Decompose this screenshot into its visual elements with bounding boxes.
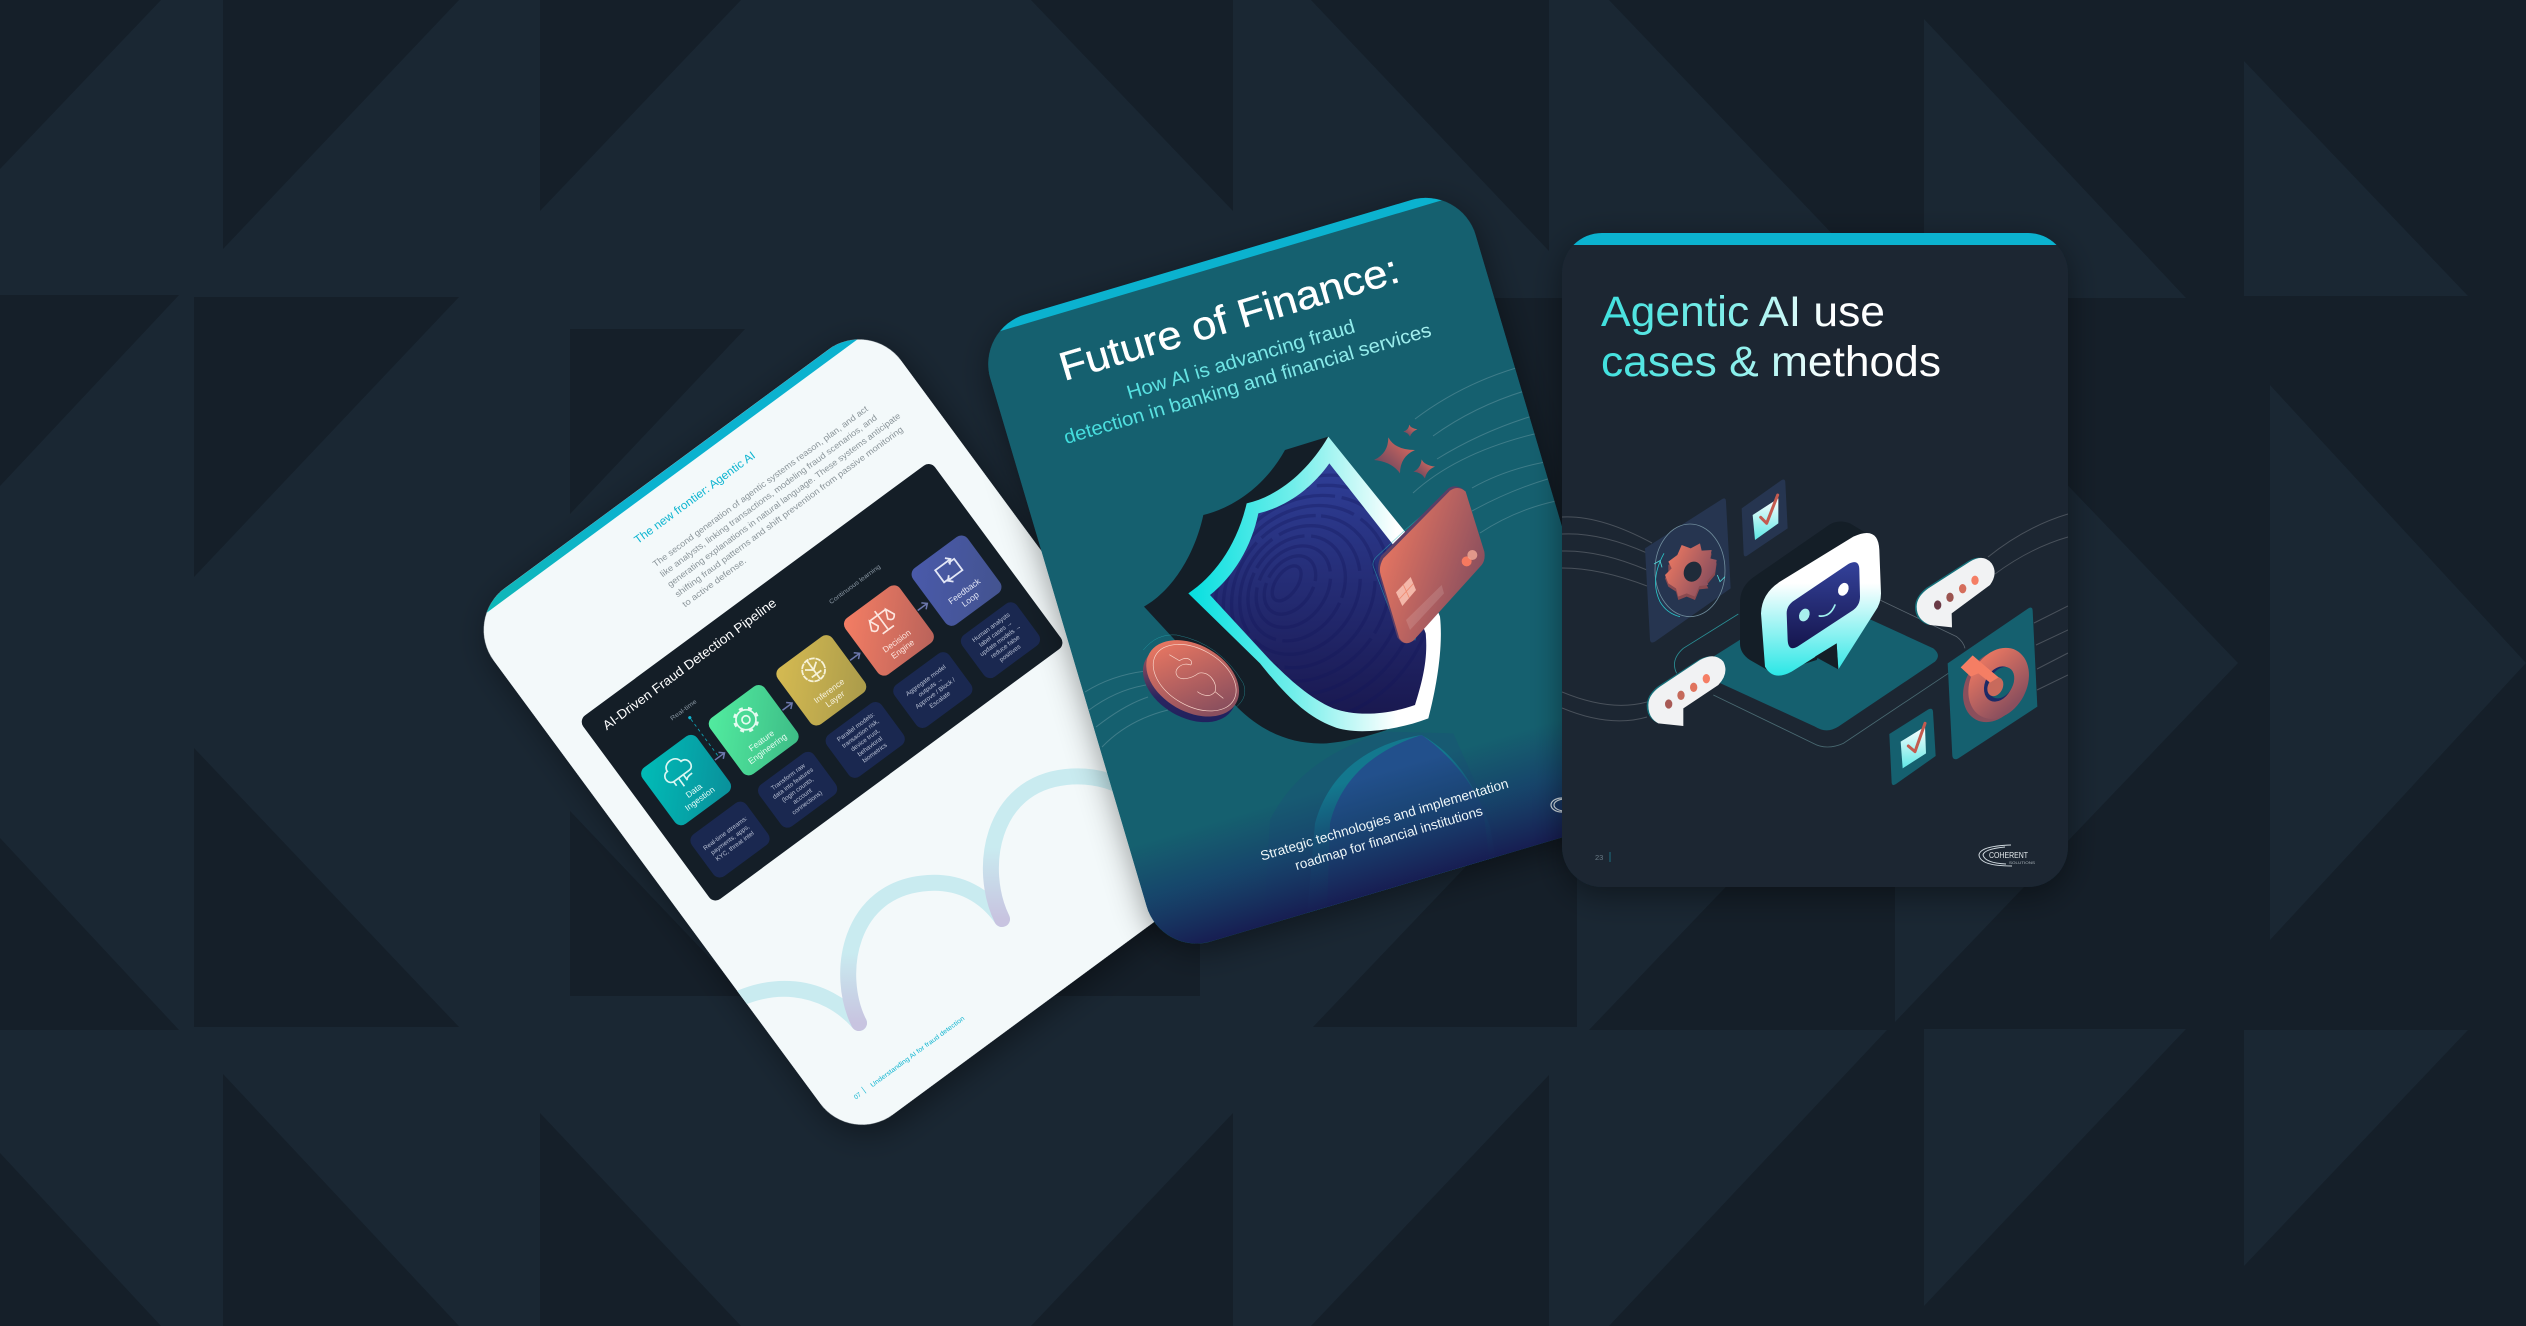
icon: sparkle stars [1374, 425, 1435, 478]
pipeline title: AI-Driven Fraud Detection Pipeline [600, 595, 779, 733]
body paragraph [651, 390, 917, 609]
icon: credit card [1373, 486, 1485, 643]
decorative arcs [715, 776, 1145, 1023]
icon: scales [863, 603, 900, 638]
description: feature engineering: account [792, 787, 814, 806]
label: real-time [669, 698, 731, 766]
description: feature engineering: connections) [791, 790, 824, 816]
step: data ingestion: Data [684, 781, 704, 800]
arrows between steps [712, 600, 930, 763]
step: inference layer [773, 632, 869, 729]
step: inference layer: Inference [812, 676, 846, 705]
shield reflection arch [1308, 735, 1504, 913]
icon: brain [798, 654, 830, 686]
footer: page 07: Understanding AI for fraud detection [869, 1015, 966, 1089]
body paragraph: like analysts, linking transactions, modeling fraud scenarios, and [658, 412, 879, 579]
icon: gear panel [1645, 498, 1731, 643]
footer: page 07 [852, 1013, 966, 1101]
logo: coherent solutions: SOLUTIONS [2009, 861, 2036, 865]
cover subtitle: How AI is advancing fraud [1124, 316, 1358, 404]
description: inference layer [822, 699, 908, 781]
description: inference layer: transaction risk, [841, 718, 881, 750]
cover title: Future of Finance: [1054, 247, 1404, 390]
bottom navy fade [1134, 739, 1562, 944]
description: feedback loop: Human analysts [971, 612, 1011, 644]
logo: coherent solutions [1979, 845, 2036, 866]
body paragraph: generating explanations in natural language. These systems anticipate [665, 411, 903, 589]
step: inference layer: Layer [823, 688, 847, 709]
panel: pipeline diagram [579, 461, 1066, 904]
description: data ingestion: payments, apps, [710, 823, 751, 857]
description: feature engineering [755, 749, 840, 831]
body paragraph: to active defense. [680, 555, 748, 609]
step: decision engine: Decision [881, 627, 913, 655]
step: decision engine: Engine [889, 637, 916, 661]
step: data ingestion: Ingestion [683, 784, 717, 813]
description: inference layer: behavioral [856, 735, 884, 758]
icon: target panel [1948, 608, 2041, 759]
page number 23: 23 [1595, 853, 1603, 862]
description: decision engine: Escalate [928, 690, 952, 710]
shield [1144, 436, 1441, 744]
cover subtitle: detection in banking and financial services [1061, 319, 1434, 449]
description: feature engineering: Transform raw [770, 762, 807, 792]
panel: left tilted page, agentic AI pipeline [483, 339, 1156, 1133]
step: data ingestion [638, 732, 734, 828]
icon: loop arrows [933, 554, 965, 586]
cover strapline: roadmap for financial institutions [1293, 803, 1485, 873]
icon: speech bubble right [1915, 558, 1995, 627]
description: feedback loop: reduce false [990, 634, 1022, 660]
step: feature engineering: Feature [747, 728, 776, 753]
page title: cases & methods [1601, 338, 1941, 386]
logo: coherent solutions: COHERENT [1989, 851, 2028, 860]
icon: cloud [658, 752, 699, 793]
description: decision engine: Approve / Block / [914, 677, 957, 711]
page number 23 [1595, 852, 1610, 862]
panel: middle tilted cover, future of finance [988, 198, 1562, 953]
icon: coin [1142, 634, 1245, 722]
step: feature engineering [706, 682, 802, 779]
description: feedback loop: update models → [979, 623, 1023, 658]
step: feedback loop [908, 532, 1005, 629]
description: decision engine: Aggregate model [905, 664, 947, 698]
description: feature engineering: data into features [771, 766, 815, 801]
icon: robot chat bubble [1740, 521, 1881, 676]
label: real-time: Real-time [669, 698, 699, 722]
step: decision engine [841, 582, 937, 679]
description: decision engine [890, 649, 976, 731]
icon: gear [730, 704, 762, 736]
description: feedback loop: positives [998, 643, 1022, 664]
description: data ingestion [687, 798, 773, 881]
icon: checkbox panel bottom [1889, 709, 1936, 785]
page title: Agentic AI use [1601, 288, 1885, 336]
cover strapline: Strategic technologies and implementation [1259, 776, 1510, 863]
platform [1714, 620, 1938, 730]
illustration: chatbot on platform [1645, 480, 2041, 785]
description: feedback loop: label cases → [978, 620, 1014, 649]
thin motion lines [1562, 514, 2068, 721]
description: inference layer: biometrics [861, 742, 889, 765]
body paragraph: The second generation of agentic systems reason, plan, and act [651, 403, 870, 569]
description: feedback loop [958, 599, 1043, 681]
icon: speech bubble left [1647, 656, 1725, 726]
description: data ingestion: KYC, threat intel [715, 830, 756, 863]
icon: checkbox panel top [1742, 480, 1788, 556]
description: inference layer: device trust, [850, 727, 881, 753]
page title [1601, 288, 1941, 386]
platform outlines [1674, 600, 1965, 747]
footer: page 07: 07 [853, 1091, 863, 1101]
label: continuous learning: Continuous learning [828, 563, 883, 606]
illustration: shield, coin, card [1142, 424, 1485, 744]
description: decision engine: outputs → [917, 676, 944, 699]
step: feature engineering: Engineering [746, 731, 789, 766]
body paragraph: shifting fraud patterns and shift prevention from passive monitoring [673, 424, 905, 599]
thin motion lines [1085, 368, 1556, 747]
heading: the new frontier: The new frontier: Agentic AI [632, 450, 758, 547]
description: inference layer: Parallel models: [836, 711, 876, 744]
step: feedback loop: Loop [960, 589, 981, 609]
description: data ingestion: Real-time streams: [702, 815, 749, 852]
description: feature engineering: (login counts, [781, 776, 815, 804]
step: feedback loop: Feedback [946, 576, 983, 606]
logo fragment at edge [1550, 797, 1562, 813]
panel: right page, agentic AI use cases [1562, 233, 2068, 887]
